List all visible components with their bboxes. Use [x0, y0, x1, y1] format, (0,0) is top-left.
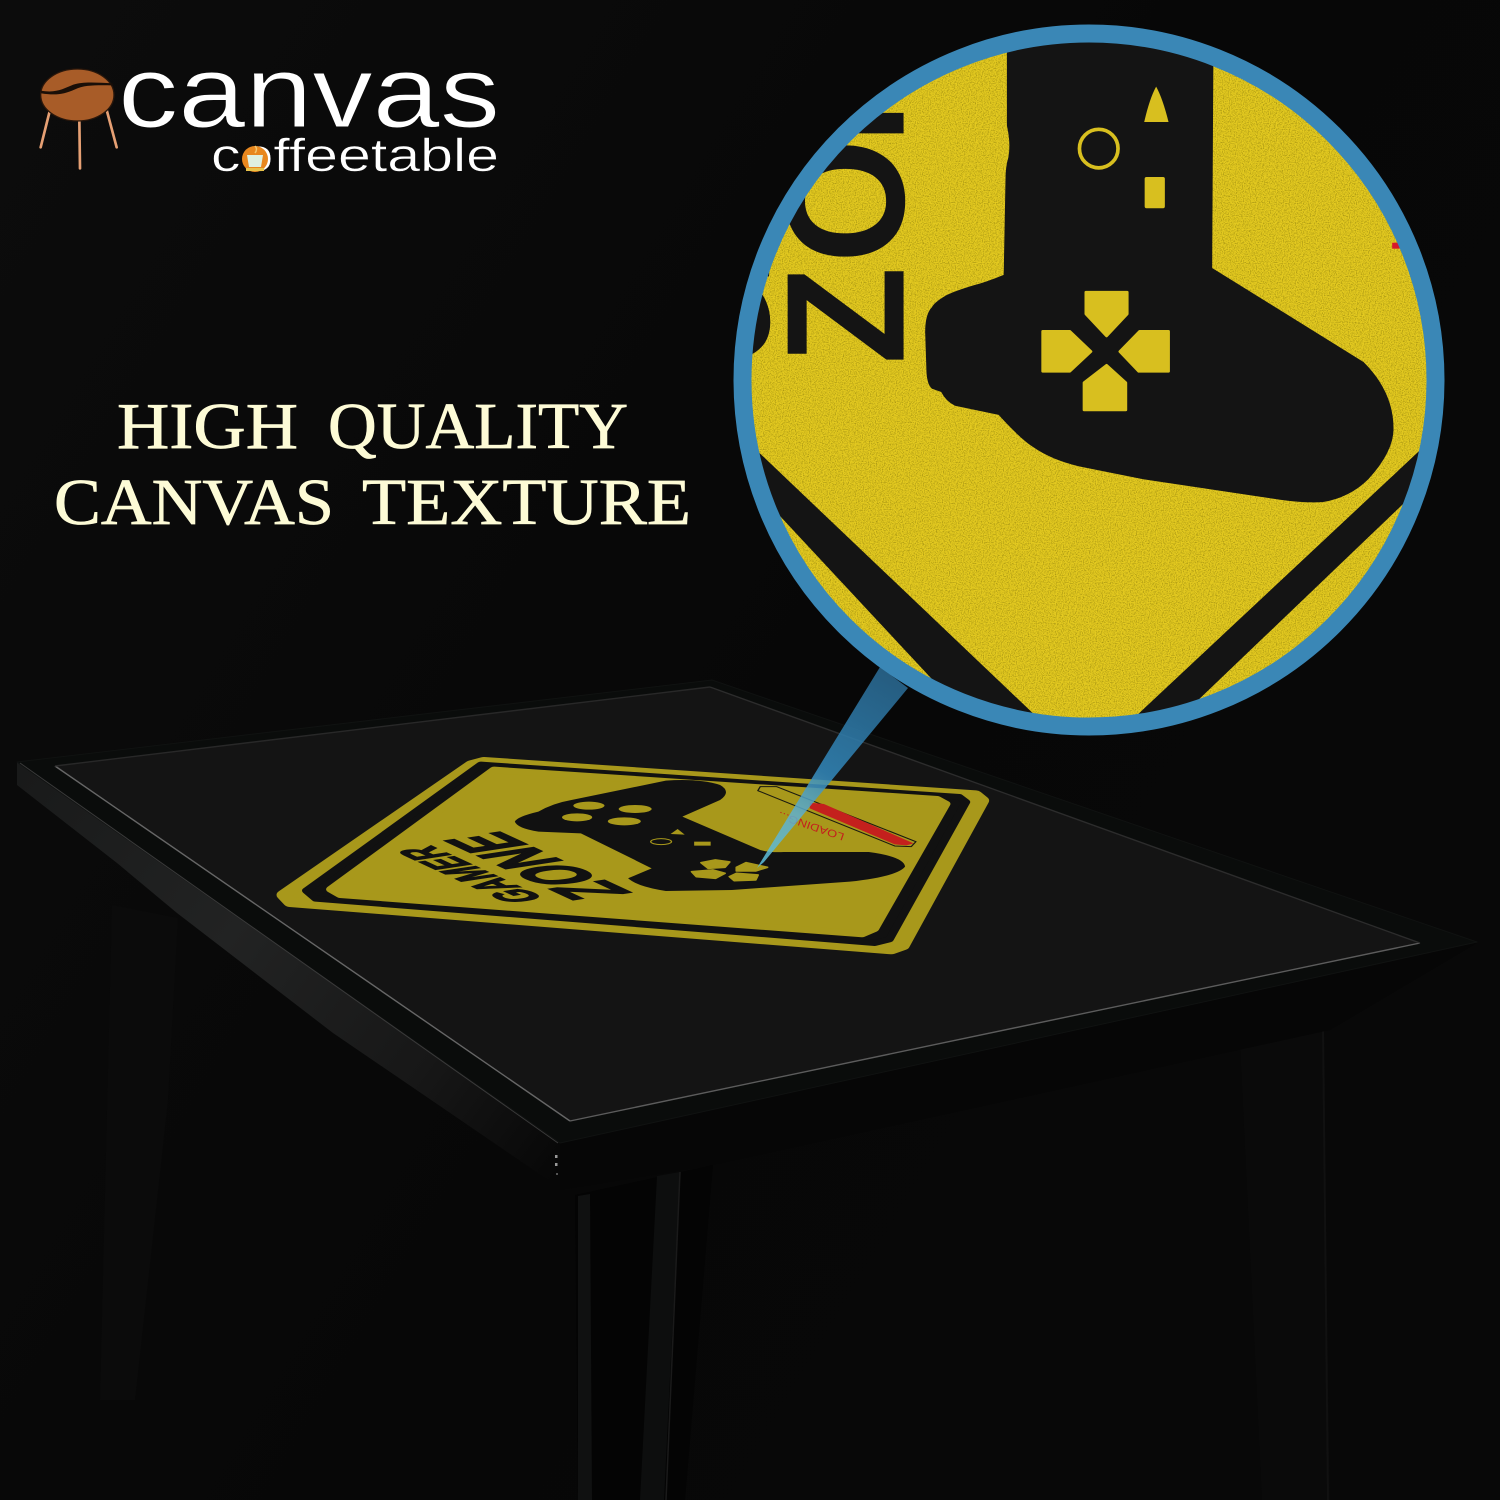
game controller silhouette: [515, 780, 905, 891]
logo word: coffeetable: coffeetable: [211, 129, 499, 181]
table: [17, 680, 1477, 1500]
sign yellow outer: [284, 762, 982, 949]
magnified ring button: [1079, 129, 1118, 168]
heading: [54, 390, 691, 539]
magnified controller: [925, 29, 1394, 502]
logo: [41, 35, 500, 181]
magnified d-pad: [1043, 292, 1169, 410]
logo icon: coffee bean table: [41, 69, 117, 168]
glass edges: [20, 687, 1420, 1143]
controller d-pad: [692, 860, 767, 881]
magnifier ring: [742, 34, 1436, 726]
table legs: [41, 110, 117, 168]
red speck: [1392, 243, 1400, 249]
controller face buttons: [562, 802, 711, 846]
table frame top: [17, 680, 1477, 1143]
sign yellow inner: [331, 770, 946, 934]
magnified triangle button: [1144, 87, 1169, 122]
magnifier circle: [734, 24, 1444, 736]
table leg: back left: [100, 905, 178, 1400]
table side: right apron: [560, 943, 1477, 1190]
controller ring button: [651, 839, 671, 845]
magnified square button: [1145, 177, 1165, 208]
magnified canvas print: [752, 42, 1426, 718]
frame corner screws: [555, 1155, 558, 1175]
callout beam: [757, 667, 908, 868]
word: gamer: GAMER: [385, 844, 557, 905]
heading line 2: TEXTURE: [362, 466, 691, 539]
magnified letters: [752, 112, 906, 360]
table leg: back right: [1240, 1025, 1330, 1500]
logo icon: coffee cup: [242, 146, 268, 172]
heading line 1: QUALITY: [328, 390, 628, 463]
glass surface: [55, 687, 1420, 1121]
heading line 1: HIGH: [117, 390, 298, 463]
heading line 2: CANVAS: [54, 466, 334, 539]
sign lettering: [385, 809, 846, 905]
magnified sign border: [759, 451, 1419, 714]
table leg: front: [575, 1165, 713, 1500]
canvas weave texture: [740, 30, 1440, 730]
logo word: canvas: canvas: [118, 35, 500, 149]
printed sign on table: [284, 762, 982, 949]
word: loading: LOADING...: [777, 809, 846, 842]
loading bar: [758, 787, 916, 847]
coffee bean: [41, 69, 114, 121]
word: zone: ZONE: [424, 828, 650, 904]
sign black border: [306, 765, 966, 943]
table side: left apron: [17, 762, 560, 1188]
